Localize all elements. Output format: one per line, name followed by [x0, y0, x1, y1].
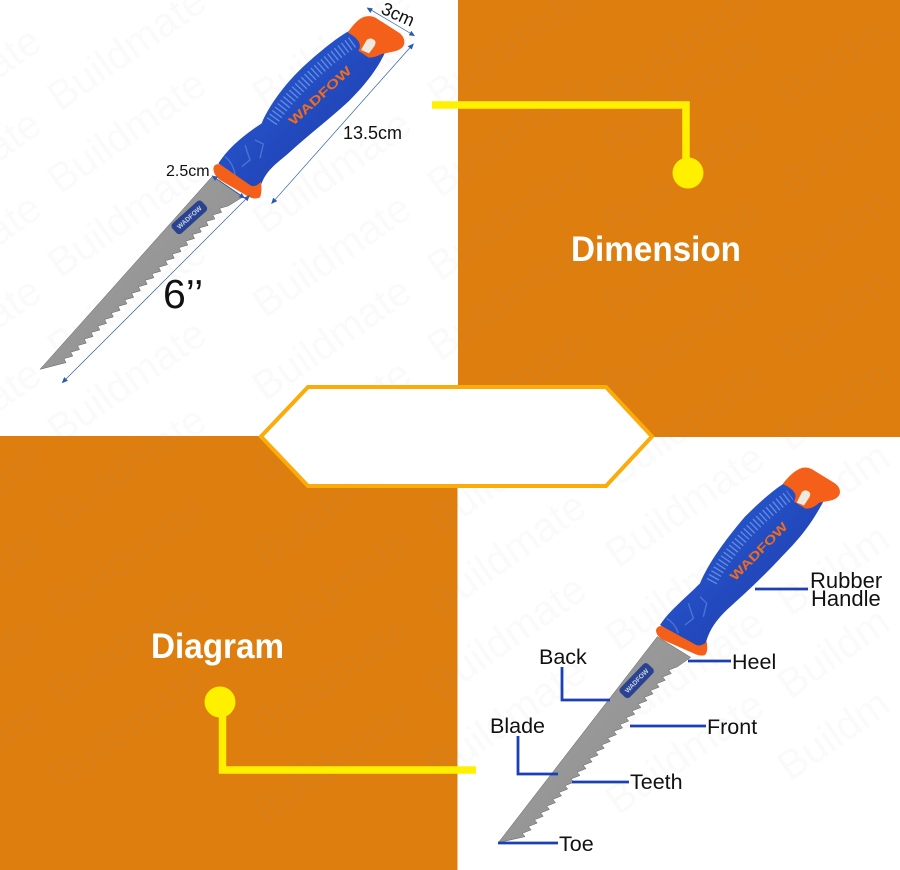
centre hexagon banner [261, 387, 652, 486]
watermark pattern: Buildm [769, 680, 898, 789]
heading: Dimension: Dimension [571, 230, 741, 269]
callout: heel [688, 650, 776, 674]
watermark pattern: Buildm [769, 598, 898, 707]
grip ridges [272, 42, 353, 122]
callout: back: Back [539, 645, 587, 669]
watermark pattern: Buildmate [39, 396, 215, 538]
watermark pattern: Buildmate [244, 184, 420, 326]
watermark pattern: Buildmate [419, 147, 595, 289]
dimension arrows [62, 8, 414, 383]
dimension arrow: guard width [212, 176, 244, 198]
callout: toe [498, 832, 594, 856]
callout: blade: Blade [490, 714, 545, 738]
watermark pattern: Buildmate [39, 227, 215, 369]
watermark pattern: Buildmate [39, 486, 215, 628]
watermark pattern: Buildmate [597, 517, 773, 659]
handle end cap [348, 16, 404, 58]
watermark pattern: Buildmate [594, 267, 770, 409]
watermark pattern: Buildmate [597, 352, 773, 494]
blade logo: WADFOW [624, 667, 651, 695]
callout: rubber handle [755, 568, 882, 611]
callout: back [539, 645, 610, 700]
illustration: saw diagram [498, 468, 840, 843]
watermark pattern: Buildmate [594, 24, 770, 166]
saw handle [213, 16, 404, 199]
watermark pattern: Buildmate [419, 565, 595, 707]
panel: dimension background [458, 0, 900, 437]
handle brand: WADFOW [727, 519, 791, 584]
panel: diagram background [0, 436, 458, 870]
grip moulding [225, 140, 263, 175]
watermark pattern: Buildm [769, 515, 898, 624]
watermark pattern: Buildm [769, 260, 898, 369]
callout: teeth: Teeth [630, 770, 683, 794]
blade logo [170, 199, 209, 236]
callout: front [630, 715, 757, 739]
connector: diagram [204, 686, 476, 770]
callout: rubber handle: Handle [811, 586, 881, 611]
watermark pattern: Buildmate [244, 520, 420, 662]
watermark pattern: Buildmate [597, 681, 773, 823]
hang hole [361, 38, 376, 53]
watermark pattern: Buildmate [39, 144, 215, 286]
watermark pattern: Buildmate [419, 227, 595, 369]
watermark pattern: Buildmate [244, 433, 420, 575]
saw handle [656, 468, 840, 656]
watermark pattern: Buildm [769, 350, 898, 459]
watermark pattern: Buildmate [244, 690, 420, 832]
watermark pattern: Buildmate [419, 482, 595, 624]
watermark pattern: Buildmate [244, 17, 420, 159]
dimension arrow: handle width [367, 8, 414, 36]
watermark pattern: Buildm [769, 180, 898, 289]
watermark pattern: Buildmate [39, 573, 215, 715]
saw blade [40, 176, 243, 369]
connector: dimension [432, 105, 704, 188]
watermark pattern: Buildmate [419, 647, 595, 789]
watermark pattern: Buildmate [244, 350, 420, 492]
watermark pattern: Buildm [769, 97, 898, 206]
dimension arrow: handle length [272, 44, 413, 203]
handle guard [213, 164, 261, 199]
blade logo: WADFOW [176, 205, 204, 231]
blade logo [618, 662, 655, 700]
watermark pattern: Buildmate [39, 656, 215, 798]
grip ridges [712, 495, 790, 582]
heading: Diagram: Diagram [151, 627, 284, 666]
handle end cap [783, 468, 840, 509]
handle grip [218, 31, 385, 190]
callout: toe: Toe [559, 832, 594, 856]
watermark pattern: Buildmate [419, 64, 595, 206]
watermark pattern: Buildmate [244, 267, 420, 409]
watermark pattern: Buildmate [594, 104, 770, 246]
label: 6 inch: 6’’ [163, 271, 203, 317]
dimension arrow: blade [62, 196, 249, 383]
watermark pattern: Buildmate [597, 599, 773, 741]
callout: blade [490, 714, 558, 774]
callout: front: Front [707, 715, 757, 739]
illustration: saw with dimensions [40, 8, 414, 383]
watermark pattern: Buildmate [244, 606, 420, 748]
watermark pattern: Buildmate [244, 100, 420, 242]
watermark pattern: Buildmate [594, 187, 770, 329]
handle guard [656, 626, 707, 656]
watermark pattern: Buildmate [39, 60, 215, 202]
label: 2.5cm: 2.5cm [166, 163, 210, 180]
callout: teeth [572, 770, 683, 794]
saw blade [498, 637, 691, 843]
watermark pattern: Buildm [769, 7, 898, 116]
watermark pattern: Buildmate [419, 400, 595, 542]
callout: heel: Heel [732, 650, 776, 674]
watermark pattern: Buildmate [597, 434, 773, 576]
handle grip [660, 483, 823, 648]
label: 13.5cm: 13.5cm [343, 123, 402, 143]
watermark pattern: Buildm [769, 433, 898, 542]
hang hole [797, 490, 810, 505]
grip moulding [667, 597, 707, 633]
handle brand: WADFOW [286, 64, 354, 128]
watermark pattern: Buildmate [419, 317, 595, 459]
watermark pattern: Buildmate [39, 310, 215, 452]
callout: rubber handle: Rubber [810, 568, 882, 593]
